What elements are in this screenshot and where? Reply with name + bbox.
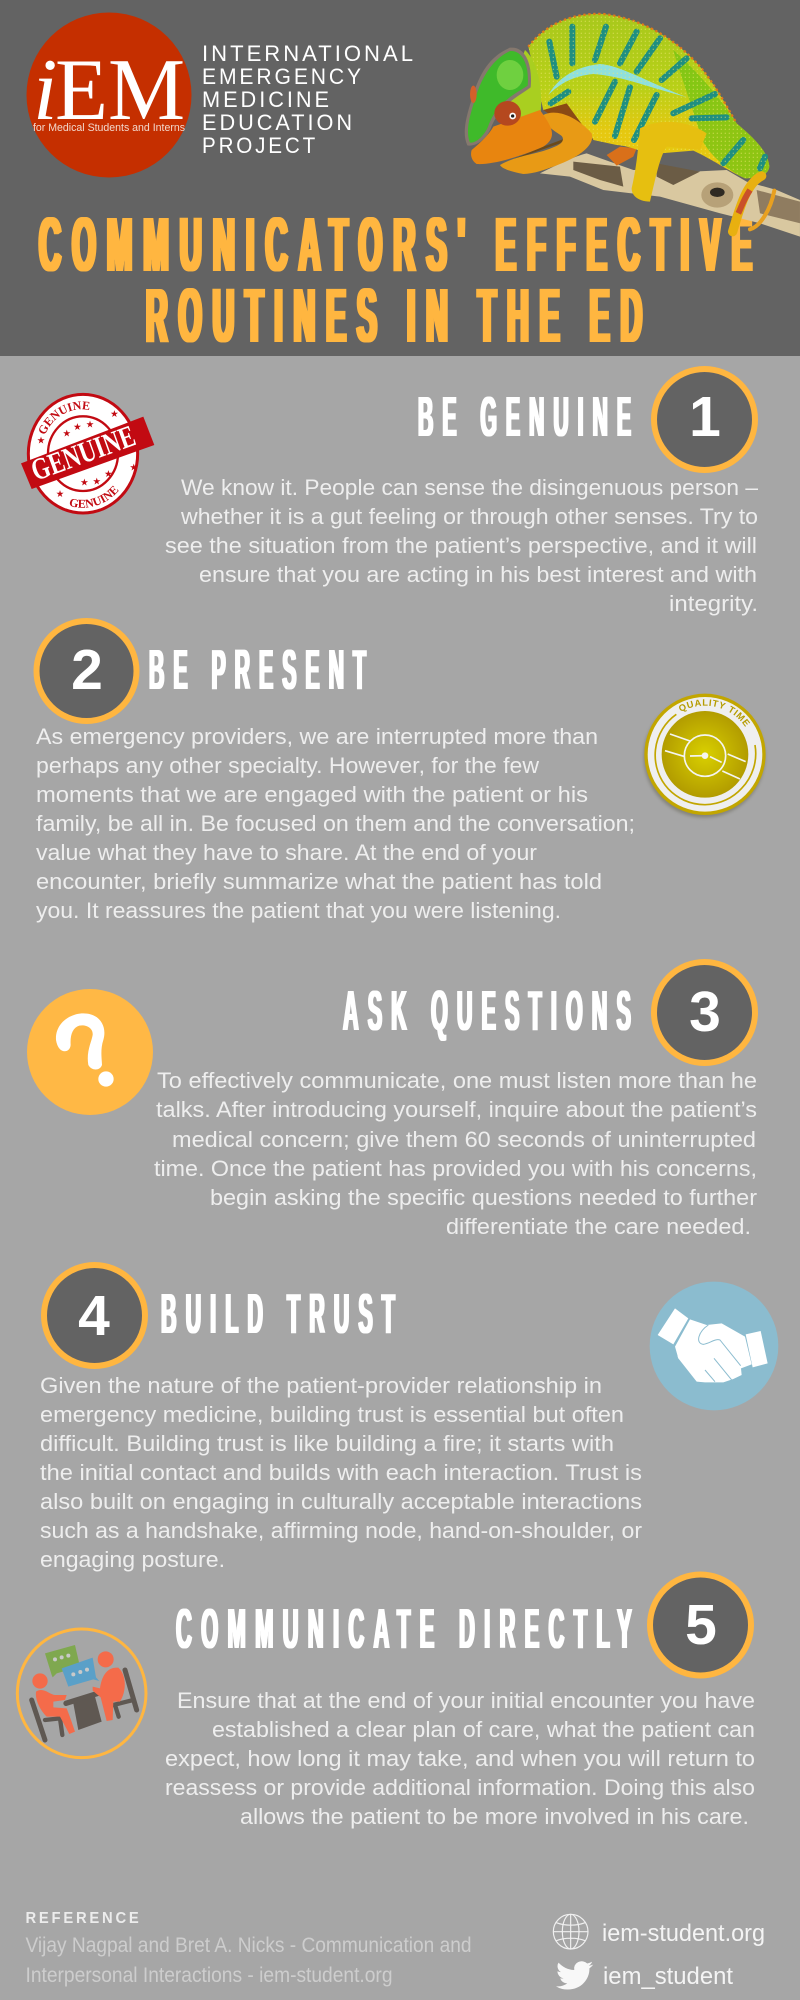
body text: value what they have to share. At the end of your (36, 840, 537, 865)
icon: quality time badge (642, 694, 766, 819)
logo: iEM: for Medical Students and Interns (33, 122, 185, 134)
footer: reference: Interpersonal Interactions - iem-student.org (26, 1964, 392, 1987)
panel: communicate directly (17, 1574, 755, 1829)
icon: genuine stamp: GENUINE (39, 401, 90, 434)
panel: ask questions (27, 962, 757, 1239)
panel: build trust: BUILD TRUST (161, 1282, 404, 1346)
body text: you. It reassures the patient that you were listening. (36, 898, 561, 923)
number badge 5 (650, 1574, 751, 1676)
organisation name: PROJECT (202, 133, 318, 158)
body text: As emergency providers, we are interrupted more than (36, 724, 598, 749)
icon: genuine stamp: GENUINE (26, 419, 140, 488)
number badge 4: 4 (78, 1284, 110, 1348)
body text (36, 724, 635, 923)
icon: genuine stamp (21, 392, 154, 514)
icon: genuine stamp: ★ (86, 420, 94, 430)
number badge 2 (36, 621, 136, 721)
logo: iEM (26, 12, 192, 178)
body text: talks. After introducing yourself, inquire about the patient’s (156, 1097, 757, 1122)
icon: genuine stamp: ★ (62, 428, 71, 438)
body text: To effectively communicate, one must listen more than he (157, 1068, 757, 1093)
panel: be present: BE PRESENT (149, 638, 375, 702)
body text: moments that we are engaged with the patient or his (36, 782, 588, 807)
organisation name: INTERNATIONAL (202, 41, 416, 66)
body text: emergency medicine, building trust is essential but often (40, 1402, 624, 1427)
organisation name: EDUCATION (202, 110, 355, 135)
icon: two people talking at a table (17, 1629, 146, 1758)
body text: the initial contact and builds with each interaction. Trust is (40, 1460, 642, 1485)
icon: genuine stamp: ★ (129, 462, 138, 472)
number badge 4 (44, 1265, 145, 1366)
icon: genuine stamp: ★ (37, 436, 45, 446)
body text: reassess or provide additional information. Doing this also (165, 1775, 755, 1800)
icon: quality time badge: QUALITY TIME (679, 699, 750, 727)
icon: genuine stamp: ★ (56, 489, 64, 499)
body text: ensure that you are acting in his best interest and with (199, 562, 757, 587)
body text (154, 1068, 757, 1239)
icon: genuine stamp: ★ (73, 422, 82, 432)
footer: reference: REFERENCE (26, 1910, 142, 1927)
body text: family, be all in. Be focused on them and the conversation; (36, 811, 635, 836)
body text: also built on engaging in culturally acceptable interactions (40, 1489, 642, 1514)
panel: be genuine (21, 366, 759, 616)
body text: such as a handshake, affirming node, hand-on-shoulder, or (40, 1518, 642, 1543)
number badge 3 (654, 962, 755, 1063)
body text (40, 1373, 642, 1572)
icon: handshake (650, 1282, 778, 1410)
footer: links (553, 1914, 765, 1990)
twitter handle: iem_student (603, 1963, 733, 1990)
footer: reference (26, 1910, 472, 1987)
body text: begin asking the specific questions needed to further (210, 1185, 757, 1210)
icon: genuine stamp: ★ (104, 469, 113, 479)
body text: difficult. Building trust is like building a fire; it starts with (40, 1431, 614, 1456)
body text: established a clear plan of care, what the patient can (212, 1717, 755, 1742)
body text: encounter, briefly summarize what the patient has told (36, 869, 602, 894)
number badge 5: 5 (685, 1593, 717, 1657)
icon: genuine stamp: GENUINE (70, 486, 119, 508)
organisation name (202, 41, 416, 158)
number badge 2: 2 (71, 638, 103, 702)
organisation name: MEDICINE (202, 87, 332, 112)
icon: genuine stamp: ★ (80, 478, 89, 488)
body text: medical concern; give them 60 seconds of uninterrupted (172, 1127, 756, 1152)
body text: We know it. People can sense the disingenuous person – (181, 475, 759, 500)
number badge 3: 3 (689, 980, 721, 1044)
body text: differentiate the care needed. (446, 1214, 751, 1239)
body text: expect, how long it may take, and when you will return to (165, 1746, 755, 1771)
footer: reference: Vijay Nagpal and Bret A. Nicks - Communication and (26, 1934, 472, 1957)
body text: engaging posture. (40, 1547, 225, 1572)
body text: see the situation from the patient’s perspective, and it will (165, 533, 757, 558)
body text: time. Once the patient has provided you with his concerns, (154, 1156, 757, 1181)
header panel (0, 0, 800, 359)
body text (165, 475, 759, 616)
body text: whether it is a gut feeling or through other senses. Try to (180, 504, 758, 529)
icon: twitter bird (556, 1961, 593, 1990)
organisation name: EMERGENCY (202, 64, 364, 89)
icon: genuine stamp: ★ (92, 476, 101, 486)
icon: question mark (27, 989, 153, 1115)
logo: iEM: i (33, 42, 57, 139)
body text: perhaps any other specialty. However, for the few (36, 753, 539, 778)
body text (165, 1688, 755, 1829)
body text: Given the nature of the patient-provider relationship in (40, 1373, 602, 1398)
icon: genuine stamp: ★ (110, 409, 119, 419)
body text: allows the patient to be more involved in his care. (240, 1804, 749, 1829)
number badge 1 (654, 369, 755, 470)
panel: build trust (40, 1265, 778, 1572)
body text: integrity. (669, 591, 758, 616)
icon: globe (553, 1914, 588, 1949)
number badge 1: 1 (689, 385, 721, 449)
website: iem-student.org (602, 1920, 765, 1947)
body text: Ensure that at the end of your initial encounter you have (177, 1688, 755, 1713)
panel: be present (34, 618, 766, 923)
logo: iEM: EM (55, 42, 185, 139)
title (39, 202, 763, 359)
icon: chameleon on branch (465, 14, 800, 237)
